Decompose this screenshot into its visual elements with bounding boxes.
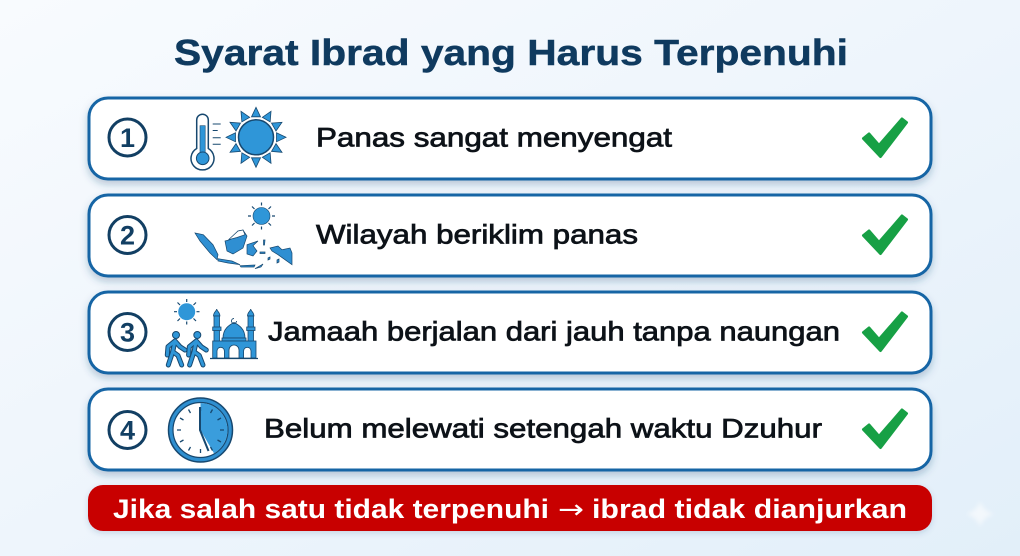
banner: warning: ibrad tidak dianjurkan	[592, 494, 907, 524]
icon: thermometer and sun	[191, 107, 286, 170]
banner: warning	[88, 485, 932, 531]
text 3: Jamaah berjalan dari jauh tanpa naungan	[268, 316, 840, 346]
number badge 3	[109, 314, 146, 350]
number badge 1: 1	[120, 123, 135, 153]
icon: clock	[168, 398, 232, 462]
panel: syarat 4	[89, 389, 931, 470]
number badge 4: 4	[120, 416, 135, 446]
number badge 1	[109, 119, 146, 156]
icon: Indonesia map and sun	[195, 202, 292, 269]
icon: check 4	[864, 410, 906, 448]
banner: warning: Jika salah satu tidak terpenuhi	[113, 494, 549, 524]
number badge 4	[109, 412, 146, 448]
icon: check 3	[864, 313, 906, 350]
text 4: Belum melewati setengah waktu Dzuhur	[264, 414, 822, 444]
text 2: Wilayah beriklim panas	[316, 220, 638, 250]
decorative sparkle	[966, 501, 994, 527]
text 1: Panas sangat menyengat	[316, 122, 673, 152]
number badge 2	[109, 216, 146, 254]
panel: syarat 1	[89, 98, 931, 179]
icon: walkers, sun and mosque	[167, 299, 258, 365]
title: Syarat Ibrad yang Harus Terpenuhi	[174, 32, 848, 73]
number badge 2: 2	[120, 220, 135, 250]
panel: syarat 2	[89, 195, 931, 276]
banner: warning: →	[558, 495, 584, 525]
icon: check 1	[864, 119, 906, 156]
icon: check 2	[864, 216, 906, 254]
number badge 3: 3	[120, 318, 135, 348]
panel: syarat 3	[89, 292, 931, 373]
